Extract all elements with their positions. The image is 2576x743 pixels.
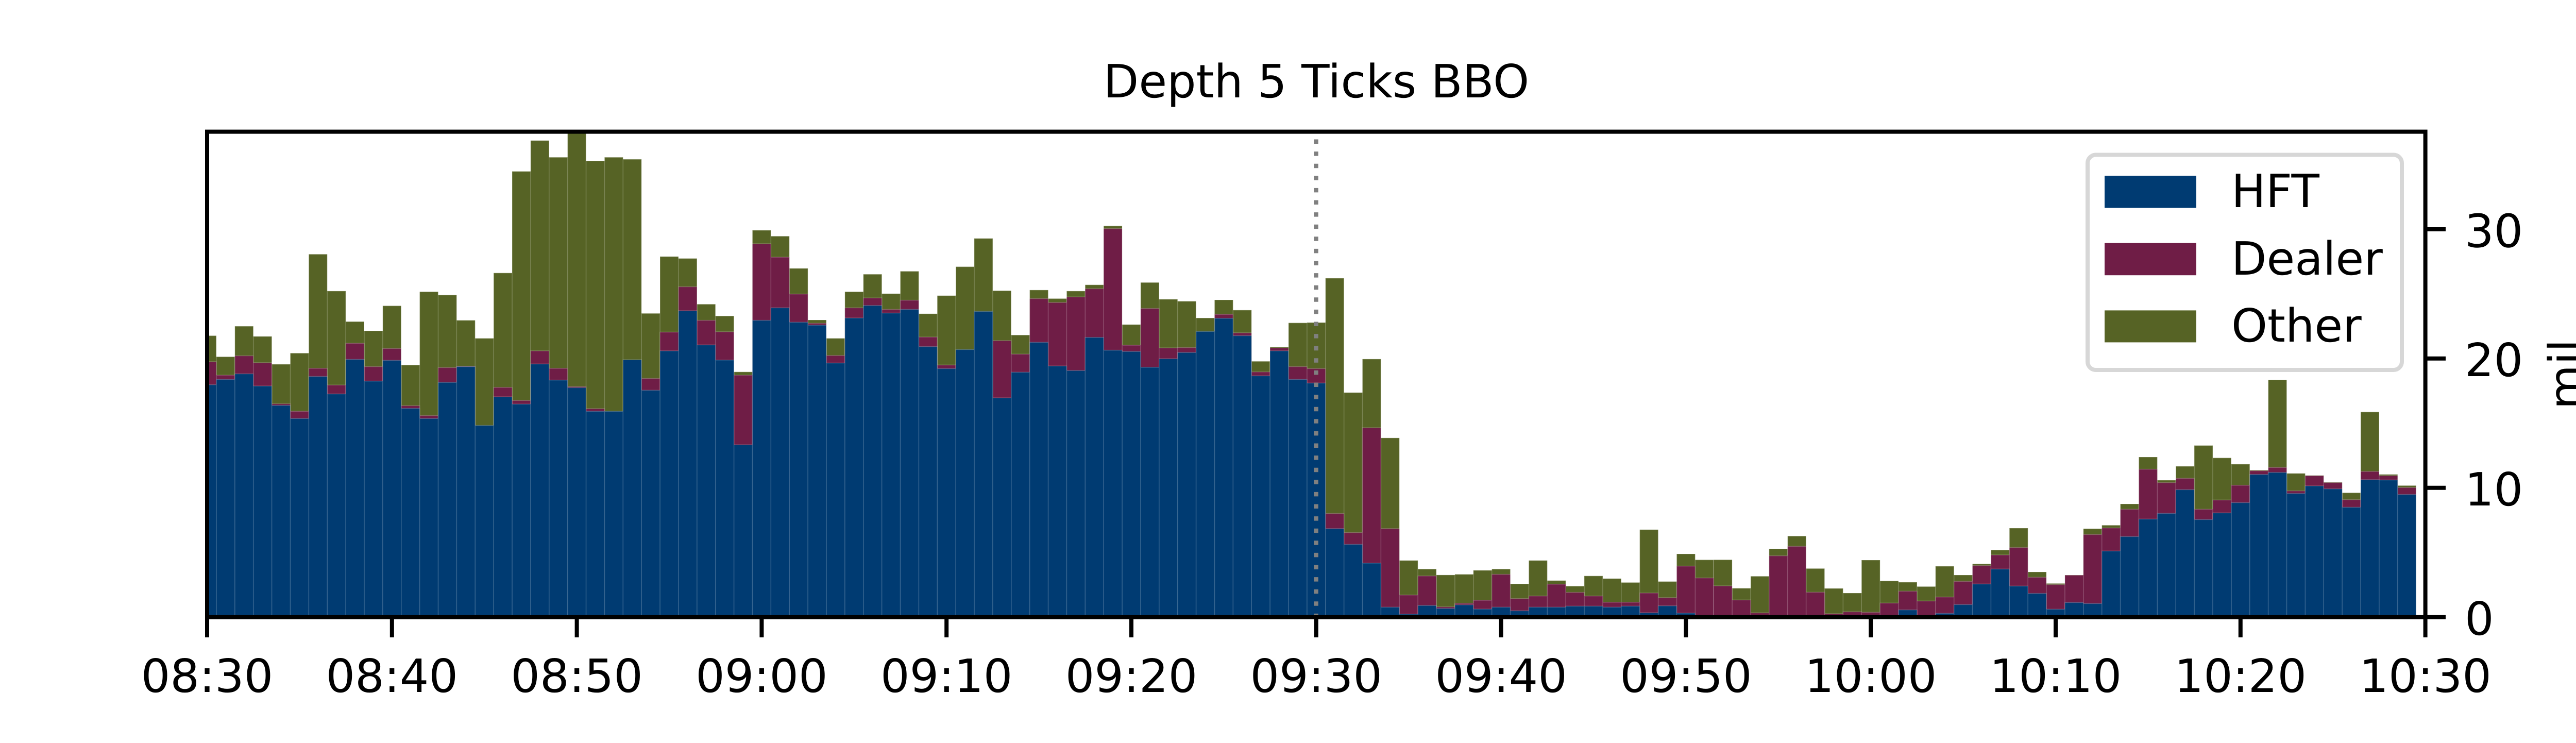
- x axis labels: 09:00: [696, 649, 828, 703]
- y axis labels: 20: [2465, 333, 2523, 387]
- axes frame: [207, 132, 2426, 617]
- legend item: Other: [2105, 299, 2362, 352]
- bars: HFT series: [207, 306, 2416, 617]
- x axis labels: 10:30: [2359, 649, 2492, 703]
- x axis labels: 09:10: [880, 649, 1012, 703]
- x axis labels: 08:50: [511, 649, 643, 703]
- title: Depth 5 Ticks BBO: [1104, 55, 1529, 108]
- y axis labels: 0: [2465, 592, 2494, 646]
- legend item: Other: Other: [2231, 299, 2362, 352]
- x axis labels: 10:10: [1990, 649, 2122, 703]
- x axis labels: 08:30: [141, 649, 273, 703]
- y axis labels: 30: [2465, 204, 2523, 258]
- y axis labels: 10: [2465, 463, 2523, 516]
- legend item: HFT: [2105, 164, 2320, 218]
- y axis ticks: [2425, 229, 2446, 617]
- legend item: Dealer: Dealer: [2231, 232, 2383, 285]
- x axis labels: 09:30: [1250, 649, 1382, 703]
- y axis labels: [2465, 204, 2523, 646]
- x axis labels: 08:40: [326, 649, 458, 703]
- bars: Dealer series: [207, 229, 2416, 617]
- x axis labels: [141, 649, 2492, 703]
- legend item: Dealer: [2105, 232, 2383, 285]
- legend: [2088, 155, 2402, 370]
- x axis labels: 10:00: [1805, 649, 1937, 703]
- x axis labels: 10:20: [2175, 649, 2307, 703]
- x axis labels: 09:50: [1620, 649, 1752, 703]
- x axis labels: 09:40: [1435, 649, 1567, 703]
- dotted vertical line at 09:30: [1314, 139, 1318, 615]
- x axis labels: 09:20: [1065, 649, 1197, 703]
- legend item: HFT: HFT: [2231, 164, 2320, 218]
- bars: Other series: [207, 132, 2416, 617]
- x axis ticks: [207, 617, 2426, 637]
